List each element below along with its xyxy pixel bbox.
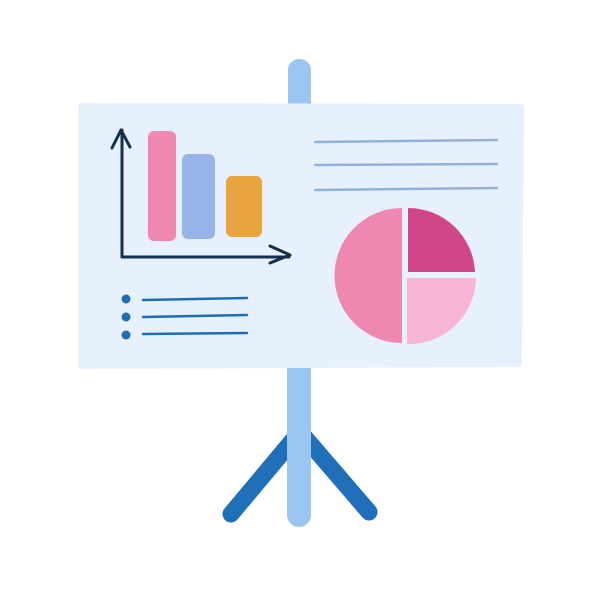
icon: left leg [231,434,298,514]
icon: top pole [288,59,311,119]
pie chart [334,208,476,344]
panel: presentation board [78,103,524,369]
easel stand [231,59,369,527]
bullet list [122,294,247,340]
icon: right leg [302,434,369,512]
text lines: right [315,140,497,190]
icon: lower pole [287,350,311,527]
bar chart [112,130,290,263]
